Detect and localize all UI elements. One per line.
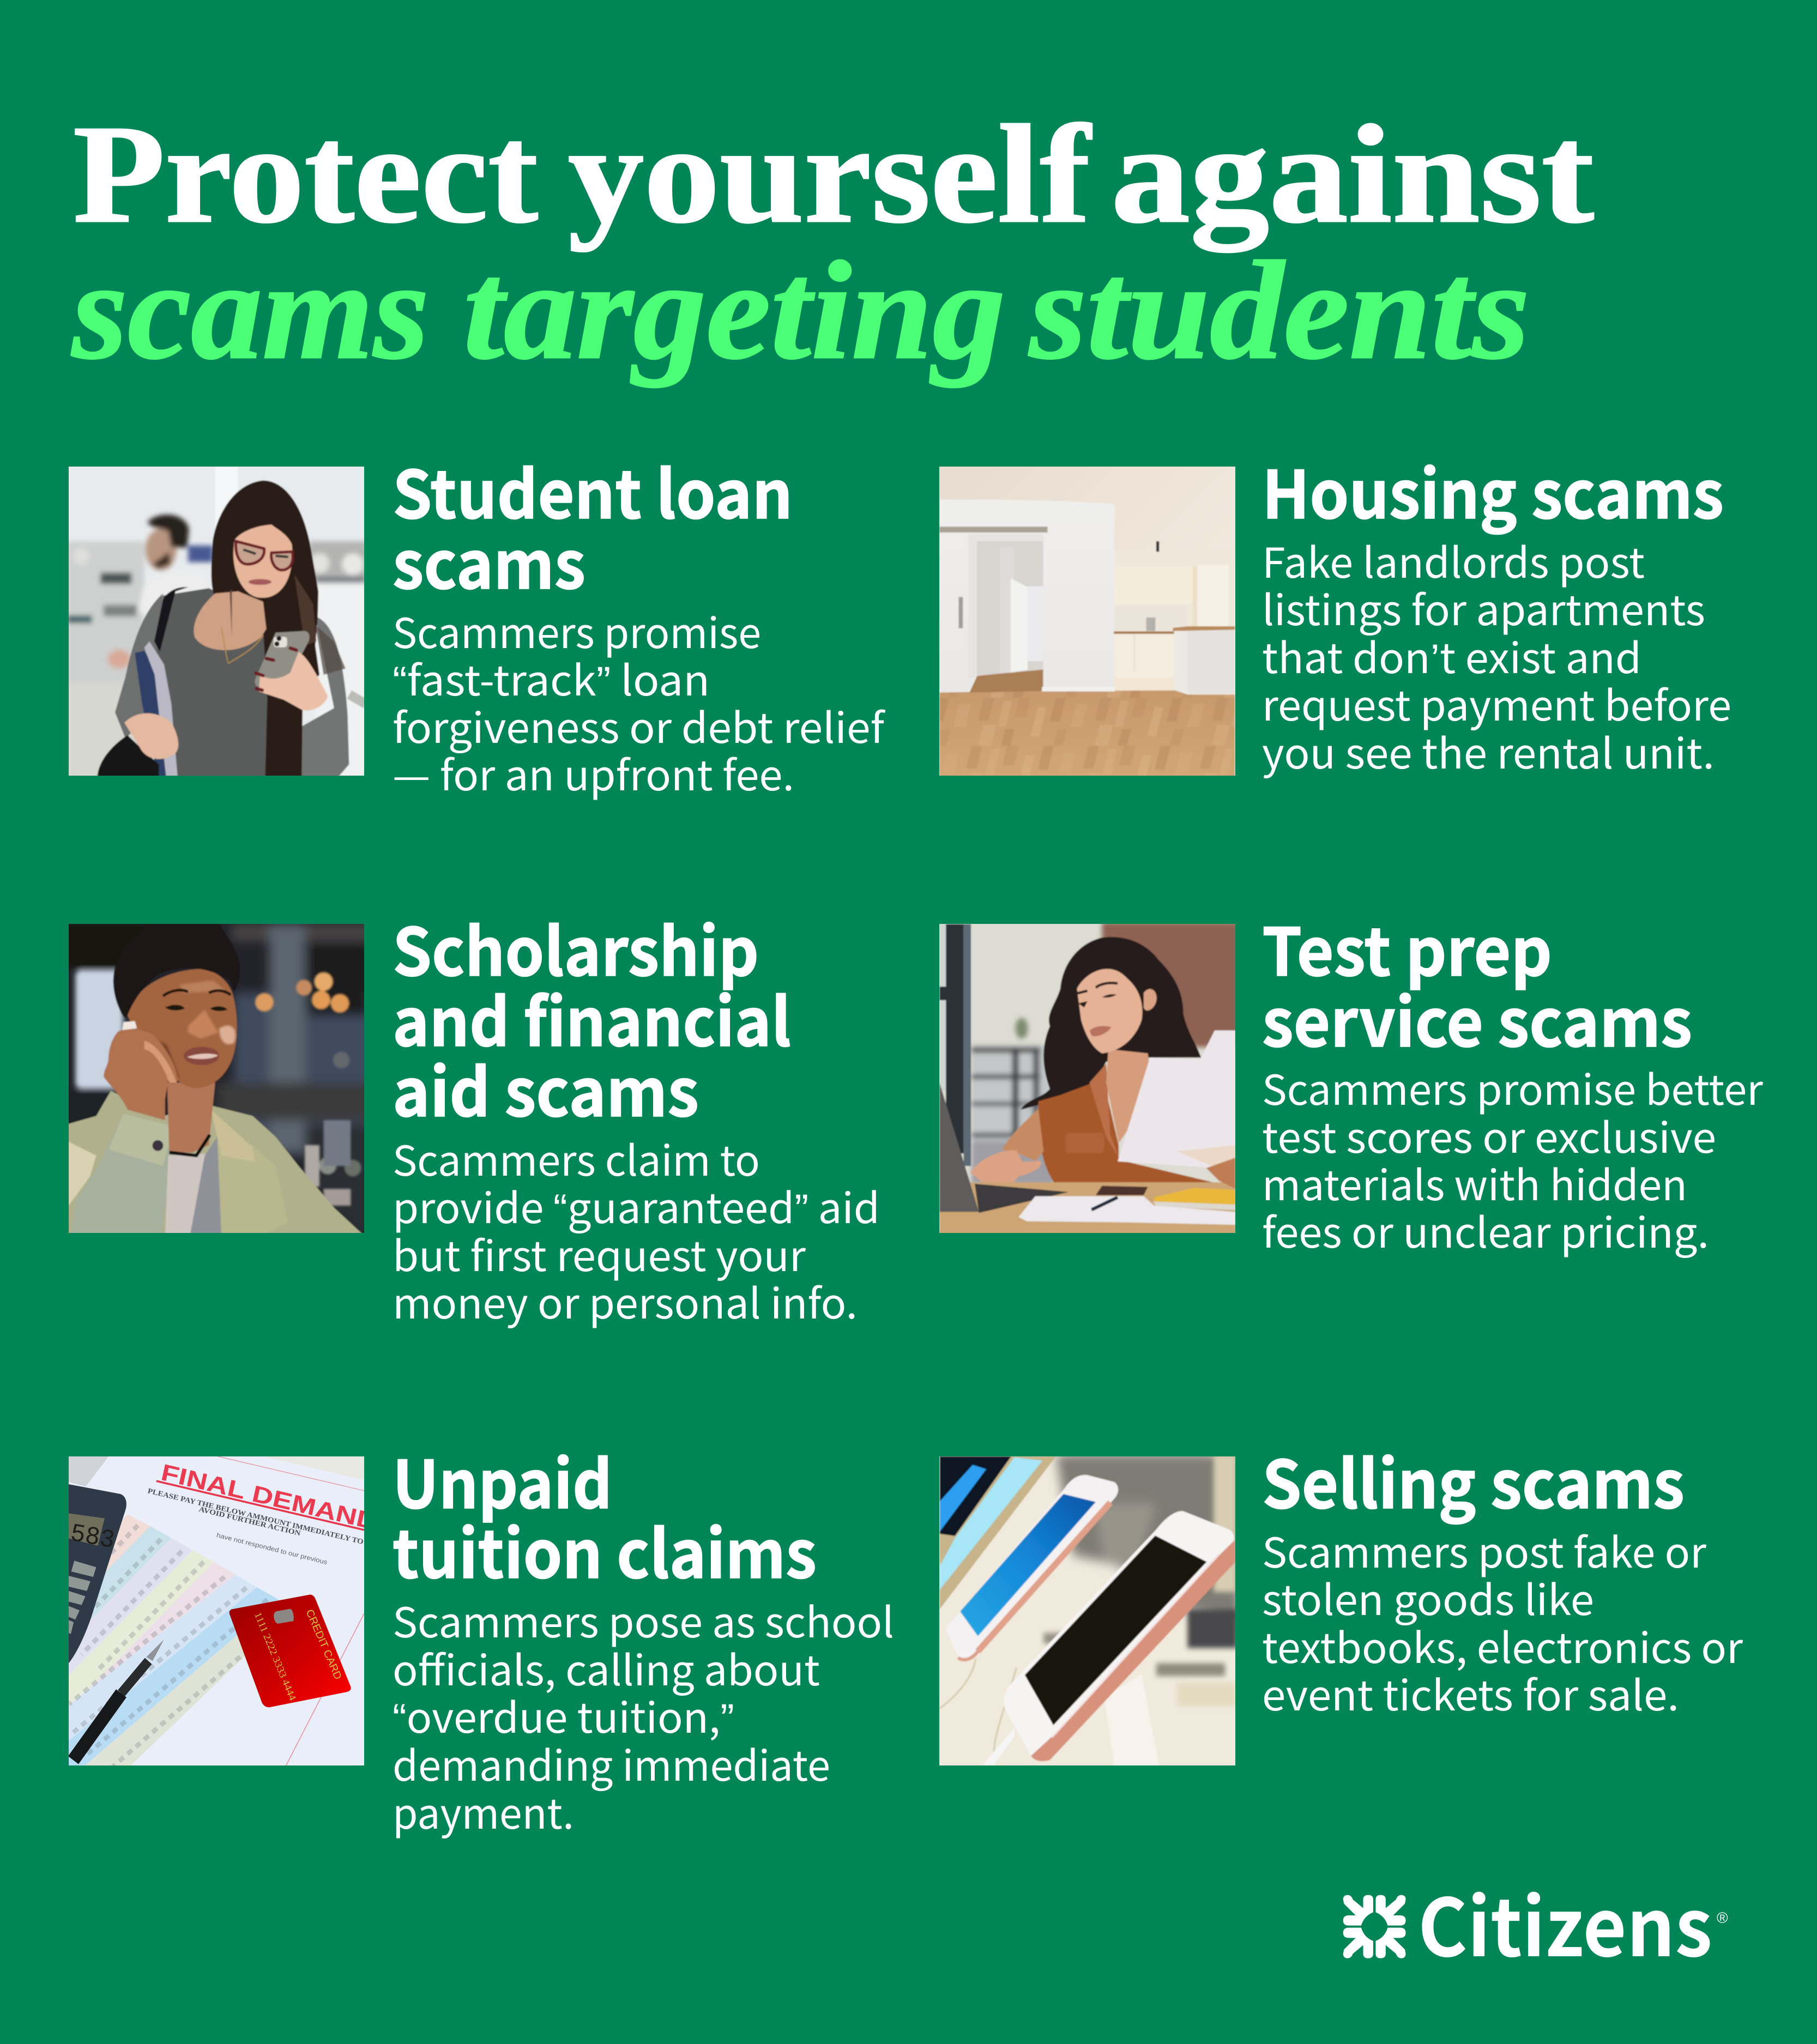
shirt [1039, 1064, 1219, 1184]
panel: unpaid tuition claims [0, 1432, 894, 1841]
title [70, 96, 1596, 388]
heading: and financial [393, 970, 791, 1065]
photo: final demand bill and credit card: PLEASE PAY THE BELOW AMMOUNT IMMEDIATELY TO [147, 1486, 364, 1546]
hand with notebooks [124, 713, 178, 759]
face [1077, 969, 1142, 1054]
credit card [230, 1594, 351, 1707]
desk [939, 1182, 1236, 1235]
body text: Scammers post fake or [1262, 1520, 1707, 1580]
body text: — for an upfront fee. [393, 742, 794, 802]
heading: Student loan [393, 442, 793, 537]
laptop [939, 1083, 979, 1212]
title line 2: targeting [463, 232, 1005, 388]
photo: student looking at phone [69, 467, 364, 776]
hair [113, 924, 240, 1018]
body text [1262, 1520, 1743, 1722]
stand and cables [1104, 1674, 1160, 1767]
body text: “overdue tuition,” [393, 1685, 734, 1745]
title line 1: yourself [568, 96, 1092, 252]
panel: test prep service scams [927, 899, 1764, 1260]
pen [73, 1694, 121, 1760]
hand with phone [259, 652, 328, 711]
body text: money or personal info. [393, 1271, 858, 1331]
body text: you see the rental unit. [1262, 721, 1715, 781]
papers [1118, 1030, 1235, 1168]
photo: woman reviewing papers at laptop [927, 916, 1254, 1243]
hand [970, 1150, 1041, 1192]
title line 1: against [1111, 96, 1596, 254]
heading: aid scams [393, 1040, 699, 1135]
far phones [940, 1456, 1056, 1609]
photo: young man on phone [55, 916, 382, 1243]
jacket [67, 1091, 363, 1235]
heading: scams [393, 512, 585, 608]
panel: housing scams [927, 442, 1731, 785]
body text [393, 600, 886, 802]
heading: Selling scams [1262, 1432, 1685, 1527]
panel: scholarship and financial aid scams [55, 899, 880, 1331]
heading: Scholarship [393, 899, 759, 995]
bag [97, 735, 159, 777]
body text: textbooks, electronics or [1262, 1615, 1743, 1675]
body text: “fast-track” loan [393, 648, 710, 707]
heading: Unpaid [393, 1432, 612, 1527]
body text: payment. [393, 1781, 574, 1841]
body text: test scores or exclusive [1262, 1105, 1716, 1165]
body text [1262, 530, 1731, 781]
phone [255, 631, 310, 688]
heading: Housing scams [1262, 442, 1724, 537]
hand [104, 1029, 178, 1120]
heading [1262, 899, 1692, 1066]
photo: final demand bill and credit card: have not responded to our previous [216, 1532, 328, 1566]
body text: but first request your [393, 1223, 806, 1283]
body text: demanding immediate [393, 1733, 830, 1793]
front phone [1004, 1511, 1234, 1757]
heading [393, 899, 791, 1135]
body text: fees or unclear pricing. [1262, 1200, 1709, 1260]
photo: final demand bill and credit card: 1111 2222 3333 4444 [252, 1611, 298, 1703]
demand heading: FINAL DEMAND [159, 1459, 380, 1535]
body text: that don’t exist and [1262, 625, 1641, 685]
t-shirt [165, 1137, 221, 1235]
body text: Scammers promise better [1262, 1057, 1764, 1117]
body text [393, 1128, 880, 1331]
photo: phones on display stands [927, 1439, 1254, 1777]
body text: Scammers promise [393, 600, 761, 660]
sweater [155, 588, 268, 776]
panel: student loan scams [55, 442, 886, 802]
middle phone [945, 1475, 1118, 1660]
wall [939, 500, 1114, 692]
body text: materials with hidden [1262, 1152, 1687, 1212]
photo: empty apartment [927, 458, 1254, 785]
heading: tuition claims [393, 1502, 817, 1597]
body text [393, 1589, 894, 1841]
neck and chest [194, 591, 266, 650]
title line 2: students [1027, 232, 1530, 388]
body text: Scammers claim to [393, 1128, 760, 1188]
hair [1021, 937, 1201, 1128]
registered mark: ® [1717, 1909, 1728, 1926]
neck and chest [1106, 1049, 1152, 1143]
title line 1 [73, 96, 1596, 254]
body text: request payment before [1262, 673, 1731, 733]
arm [1002, 1109, 1043, 1161]
logo: Citizens [1343, 1865, 1728, 1980]
face [233, 522, 292, 598]
heading: service scams [1262, 970, 1692, 1066]
photo: final demand bill and credit card: CREDIT CARD [304, 1607, 344, 1682]
calculator [69, 1484, 126, 1663]
body text [1262, 1057, 1764, 1260]
open notebook [1018, 1196, 1235, 1225]
title line 2 [70, 232, 1530, 388]
body text: Fake landlords post [1262, 530, 1645, 590]
strap [154, 587, 188, 652]
face [128, 969, 237, 1088]
kitchen [1114, 549, 1235, 692]
notebooks [135, 651, 167, 777]
title line 1: Protect [73, 96, 540, 252]
body text: listings for apartments [1262, 577, 1705, 637]
photo: final demand bill and credit card: 583 [68, 1519, 117, 1556]
neck [167, 1083, 215, 1152]
heading: Test prep [1262, 899, 1552, 995]
photo: final demand bill and credit card [0, 1439, 382, 1777]
photo: final demand bill and credit card: AVOID FURTHER ACTION [198, 1505, 301, 1538]
body text: event tickets for sale. [1262, 1662, 1679, 1722]
wordmark: Citizens [1418, 1865, 1712, 1980]
glasses [236, 541, 293, 570]
body text: officials, calling about [393, 1637, 820, 1697]
phone on desk [1096, 1186, 1148, 1195]
heading [393, 442, 793, 608]
icon: Citizens arrows emblem [1343, 1895, 1406, 1958]
heading [393, 1432, 817, 1597]
spreadsheet bands [0, 1514, 150, 1687]
hair [212, 480, 319, 777]
body text: forgiveness or debt relief [393, 695, 886, 755]
panel: selling scams [927, 1432, 1743, 1777]
title line 2: scams [70, 232, 429, 388]
body text: provide “guaranteed” aid [393, 1175, 880, 1235]
floor [939, 691, 1235, 777]
body text: Scammers pose as school [393, 1589, 894, 1649]
yellow notebook [1154, 1188, 1235, 1210]
body text: stolen goods like [1262, 1567, 1594, 1627]
